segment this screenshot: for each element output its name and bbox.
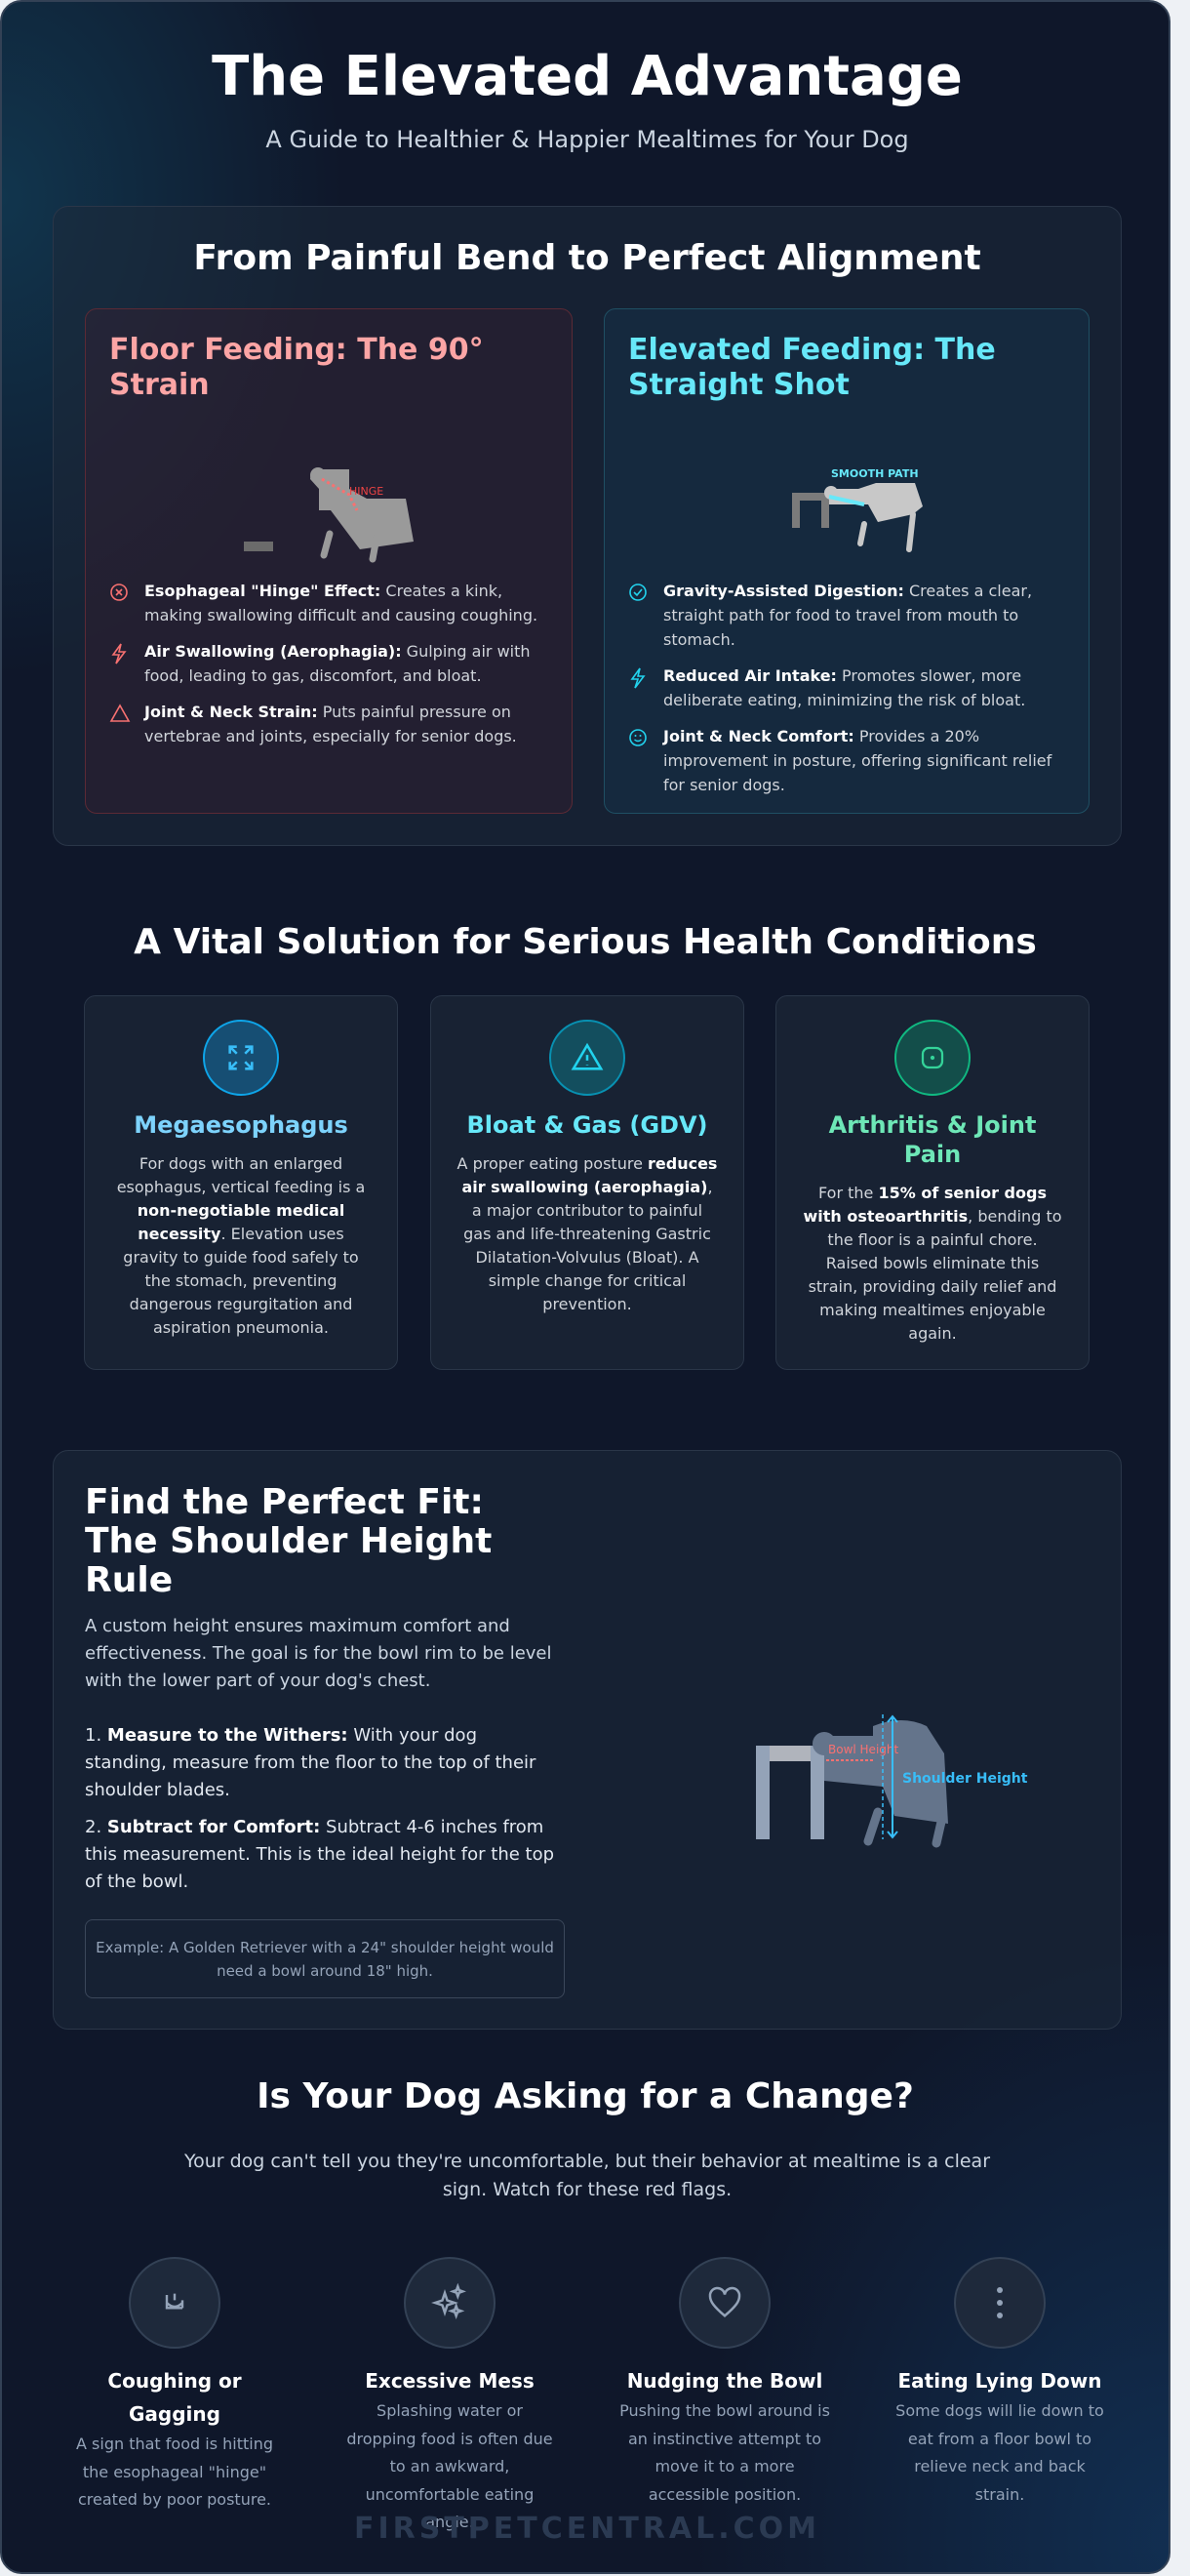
example box (85, 1919, 565, 1998)
sign: coughing (76, 2257, 273, 2509)
step 1: 1. Measure to the Withers: With your dog standing, measure from the floor to the top of their shoulder blades. (85, 1725, 536, 1800)
illustration: elevated feeding dog (792, 467, 923, 552)
intro: signs: Your dog can't tell you they're uncomfortable, but their behavior at mealtime is a clear sign. Watch for these red flags. (184, 2151, 990, 2200)
sign: lying down: Eating Lying Down (898, 2369, 1101, 2393)
card title (829, 1111, 1036, 1168)
illustration: floor feeding dog (244, 467, 414, 562)
example box: Example: A Golden Retriever with a 24" shoulder height would need a bowl around 18" high. (96, 1939, 554, 1980)
card: arthritis (775, 995, 1090, 1370)
bullet: hinge effect: Esophageal "Hinge" Effect: Creates a kink, making swallowing difficult and causing coughing. (144, 582, 537, 624)
heading: health conditions: A Vital Solution for Serious Health Conditions (134, 922, 1037, 962)
sign: mess (346, 2257, 553, 2531)
step 2: 2. Subtract for Comfort: Subtract 4-6 inches from this measurement. This is the ideal height for the top of the bowl. (85, 1817, 554, 1892)
illustration: elevated feeding dog: SMOOTH PATH (831, 467, 919, 480)
card: bloat (430, 995, 744, 1370)
card: floor feeding (85, 308, 573, 814)
heading: perfect fit: Find the Perfect Fit: The Shoulder Height Rule (85, 1482, 492, 1600)
sign: coughing: A sign that food is hitting the esophageal "hinge" created by poor posture. (76, 2435, 273, 2509)
bullet: joint strain: Joint & Neck Strain: Puts painful pressure on vertebrae and joints, especially for senior dogs. (144, 703, 517, 745)
footer: brand: FIRSTPETCENTRAL.COM (354, 2512, 820, 2546)
bullet: aerophagia: Air Swallowing (Aerophagia): Gulping air with food, leading to gas, discomfort, and bloat. (144, 642, 531, 685)
card title: floor feeding: Floor Feeding: The 90° (109, 333, 484, 367)
panel: posture comparison (53, 206, 1122, 846)
title: The Elevated Advantage (212, 45, 963, 108)
card title: elevated feeding: Straight Shot (628, 368, 850, 402)
card title: Arthritis & Joint (829, 1111, 1036, 1139)
card title: Bloat & Gas (GDV) (466, 1111, 707, 1139)
icon: dots (954, 2257, 1046, 2349)
card: megaesophagus (84, 995, 398, 1370)
diagram: shoulder height (756, 1714, 1028, 1848)
card title: floor feeding: Strain (109, 368, 210, 402)
illustration: floor feeding dog: HINGE (349, 485, 383, 498)
card: elevated feeding (604, 308, 1090, 814)
card text: For the 15% of senior dogs with osteoarthritis, bending to the floor is a painful chore. Raised bowls eliminate this strain, providing daily relief and making mealtimes enjoyable again. (804, 1184, 1061, 1343)
icon: sparkles (404, 2257, 496, 2349)
icon: expand (203, 1020, 279, 1096)
bullet: joint comfort: Joint & Neck Comfort: Provides a 20% improvement in posture, offering significant relief for senior dogs. (663, 727, 1051, 794)
card title: elevated feeding (628, 333, 996, 402)
sign: nudging: Pushing the bowl around is an instinctive attempt to move it to a more accessible position. (619, 2401, 830, 2504)
sign: mess: Excessive Mess (365, 2369, 535, 2393)
sign: mess: Splashing water or dropping food is often due to an awkward, uncomfortable eating angle. (346, 2401, 553, 2531)
bullet: reduced air: Reduced Air Intake: Promotes slower, more deliberate eating, minimizing the risk of bloat. (663, 666, 1025, 709)
sign: coughing: Coughing or (107, 2369, 242, 2393)
card text: For dogs with an enlarged esophagus, vertical feeding is a non-negotiable medical necessity. Elevation uses gravity to guide food safely to the stomach, preventing dangerous regurgitation and aspiration pneumonia. (117, 1154, 365, 1337)
card title: floor feeding (109, 333, 484, 402)
heading: posture comparison: From Painful Bend to Perfect Alignment (193, 238, 981, 278)
card title: Megaesophagus (134, 1111, 348, 1139)
sign: lying down (895, 2257, 1104, 2504)
sign: nudging: Nudging the Bowl (627, 2369, 822, 2393)
sign: nudging (619, 2257, 830, 2504)
intro text: A custom height ensures maximum comfort and effectiveness. The goal is for the bowl rim to be level with the lower part of your dog's chest. (85, 1616, 552, 1691)
card text: A proper eating posture reduces air swallowing (aerophagia), a major contributor to painful gas and life-threatening Gastric Dilatation-Volvulus (Bloat). A simple change for critical prevention. (457, 1154, 717, 1313)
sign: coughing: Gagging (129, 2402, 220, 2426)
icon: joint (894, 1020, 971, 1096)
icon: warning (549, 1020, 625, 1096)
subtitle: A Guide to Healthier & Happier Mealtimes for Your Dog (265, 126, 909, 153)
card title: elevated feeding: Elevated Feeding: The (628, 333, 996, 367)
panel: shoulder height rule (53, 1450, 1122, 2030)
icon: bowl (129, 2257, 220, 2349)
bullet: gravity digestion: Gravity-Assisted Digestion: Creates a clear, straight path for food to travel from mouth to stomach. (663, 582, 1032, 649)
card title: Pain (904, 1141, 961, 1168)
diagram: shoulder height: Shoulder Height (902, 1771, 1028, 1787)
icon: heart (679, 2257, 771, 2349)
heading: signs: Is Your Dog Asking for a Change? (257, 2076, 914, 2116)
diagram: shoulder height: Bowl Height (828, 1743, 899, 1756)
sign: lying down: Some dogs will lie down to eat from a floor bowl to relieve neck and back strain. (895, 2401, 1104, 2504)
